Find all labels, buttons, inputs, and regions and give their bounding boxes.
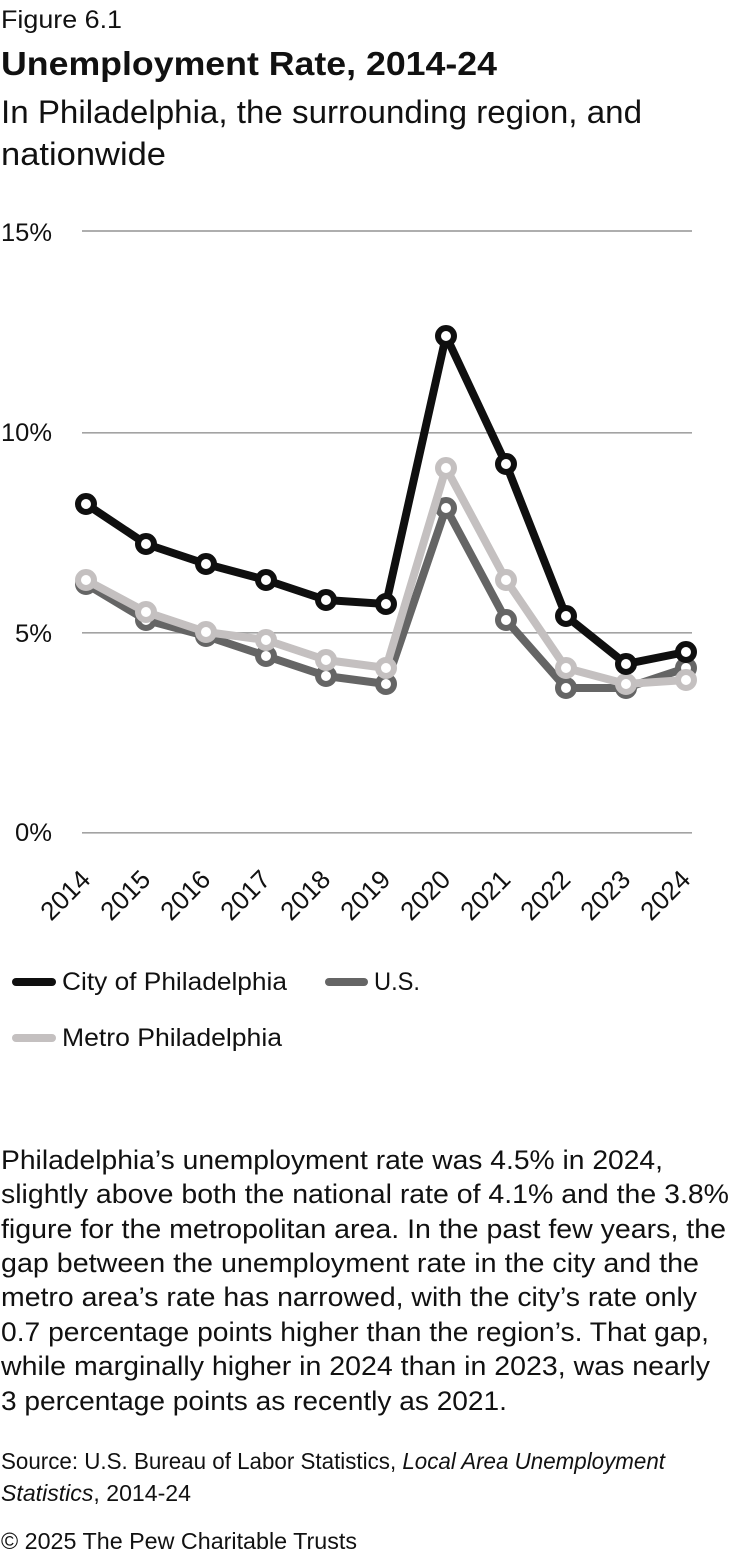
subtitle: nationwide: [1, 136, 166, 172]
legend item: U.S.: [329, 968, 420, 996]
legend item: City of Philadelphia: City of Philadelphia: [62, 968, 287, 996]
y axis labels: [1, 219, 52, 847]
figure label: Figure 6.1: [1, 6, 122, 34]
series: U.S.: [78, 500, 694, 696]
body paragraph: figure for the metropolitan area. In the past few years, the: [1, 1214, 726, 1244]
body paragraph: 3 percentage points as recently as 2021.: [1, 1386, 507, 1416]
series: Metro Philadelphia: [78, 460, 694, 692]
legend item: U.S.: U.S.: [374, 968, 420, 996]
x axis labels: 2022: [514, 864, 576, 926]
x axis labels: [34, 864, 696, 926]
x axis labels: 2016: [154, 864, 216, 926]
x axis labels: 2014: [34, 864, 96, 926]
subtitle: [1, 94, 642, 172]
body paragraph: Philadelphia’s unemployment rate was 4.5% in 2024,: [1, 1145, 663, 1175]
x axis labels: 2021: [454, 864, 516, 926]
body paragraph: slightly above both the national rate of 4.1% and the 3.8%: [1, 1179, 729, 1209]
subtitle: In Philadelphia, the surrounding region, and: [1, 94, 642, 130]
body paragraph: 0.7 percentage points higher than the region’s. That gap,: [1, 1317, 709, 1347]
y axis labels: 10%: [1, 419, 52, 447]
x axis labels: 2023: [574, 864, 636, 926]
line chart: [1, 219, 696, 926]
y axis labels: 15%: [1, 219, 52, 247]
x axis labels: 2019: [334, 864, 396, 926]
y axis labels: 5%: [15, 620, 52, 648]
body paragraph: [0, 1145, 729, 1416]
copyright: © 2025 The Pew Charitable Trusts: [1, 1528, 357, 1554]
legend: [16, 968, 420, 1052]
title: Unemployment Rate, 2014-24: [1, 45, 498, 82]
source note: [1, 1448, 667, 1506]
body paragraph: gap between the unemployment rate in the city and the: [1, 1248, 699, 1278]
source note: Statistics, 2014-24: [1, 1480, 191, 1506]
y axis gridlines: [82, 231, 692, 833]
source note: Source: U.S. Bureau of Labor Statistics, Local Area Unemployment: [1, 1448, 667, 1474]
series: City of Philadelphia: [78, 328, 694, 672]
y axis labels: 0%: [15, 819, 52, 847]
legend item: Metro Philadelphia: Metro Philadelphia: [62, 1024, 282, 1052]
body paragraph: while marginally higher in 2024 than in 2023, was nearly: [0, 1351, 711, 1381]
x axis labels: 2018: [274, 864, 336, 926]
body paragraph: metro area’s rate has narrowed, with the city’s rate only: [1, 1282, 698, 1312]
x axis labels: 2020: [394, 864, 456, 926]
x axis labels: 2024: [634, 864, 696, 926]
x axis labels: 2015: [94, 864, 156, 926]
x axis labels: 2017: [214, 864, 276, 926]
